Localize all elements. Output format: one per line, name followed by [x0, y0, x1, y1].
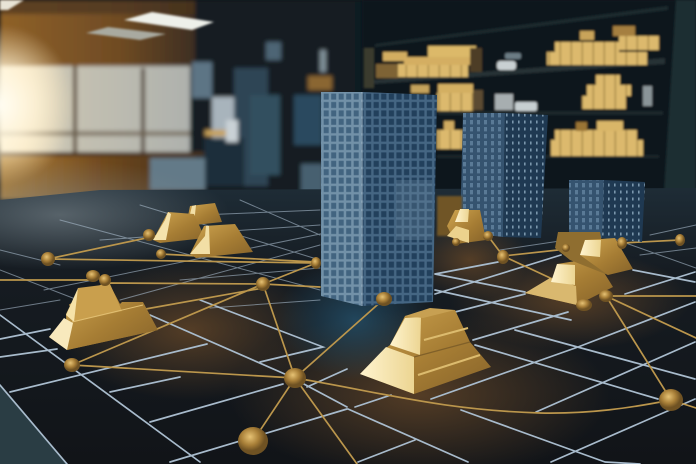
network nodes	[41, 229, 685, 455]
tower: small rear building	[569, 180, 645, 242]
gold bar: centre foreground	[360, 308, 491, 394]
shelving unit with gold bars	[362, 0, 696, 225]
back wall and office room	[0, 0, 696, 200]
gold stack: top shelf left	[376, 46, 482, 78]
gold stacks: lower shelf	[437, 121, 643, 156]
gold bar: right rear	[555, 232, 633, 275]
gold network wires	[0, 235, 696, 464]
gold bars: group behind left	[153, 203, 253, 258]
tower: middle building	[460, 113, 548, 238]
ceiling lights	[0, 0, 214, 40]
gold bar: right middle	[525, 258, 613, 305]
grid lines on floor	[0, 200, 696, 464]
bowls on shelf	[411, 53, 652, 111]
gold bar: large left	[49, 284, 158, 350]
gold stack: middle shelf right	[582, 75, 631, 109]
tower: tall foreground building	[321, 92, 437, 306]
gold stack: top shelf right	[547, 26, 659, 65]
gold bars: group behind centre	[437, 196, 486, 244]
floor	[0, 160, 696, 464]
